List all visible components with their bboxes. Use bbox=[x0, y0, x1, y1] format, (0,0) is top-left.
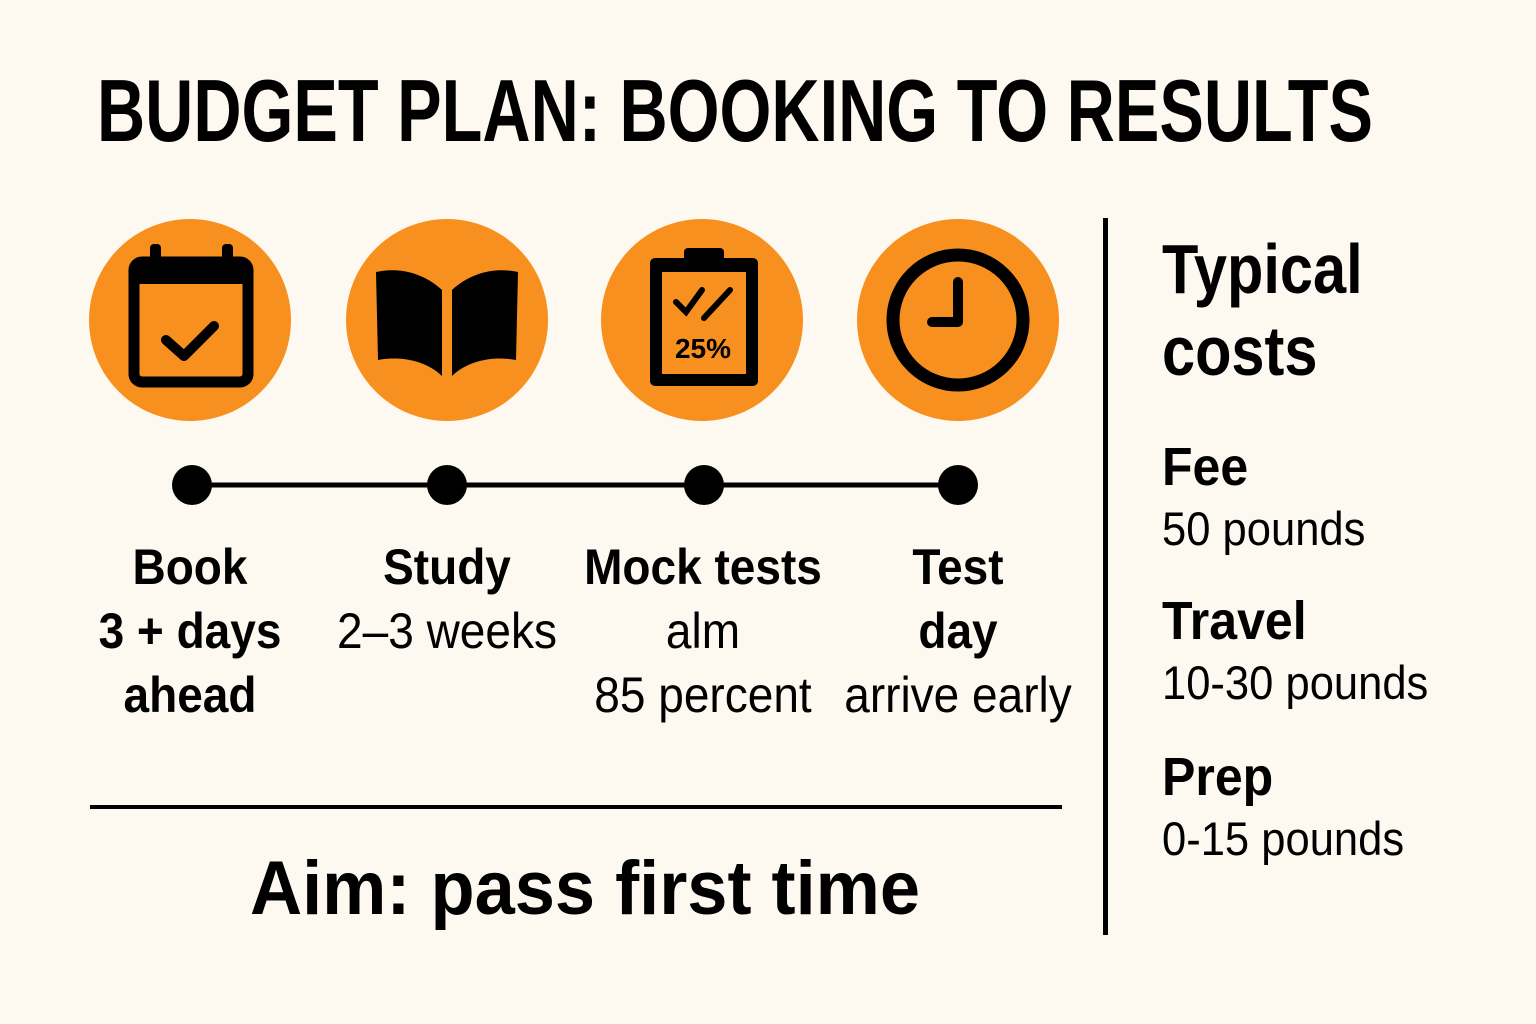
label: book: ahead bbox=[124, 667, 256, 723]
label: study bbox=[337, 539, 557, 659]
label: test day: Test bbox=[912, 539, 1004, 595]
icon: clock bbox=[857, 219, 1059, 421]
costs heading: Typical bbox=[1162, 230, 1363, 308]
icon: book bbox=[346, 219, 548, 421]
cost: fee: Fee bbox=[1162, 437, 1248, 497]
label: test day: arrive early bbox=[844, 667, 1072, 723]
label: mock tests: 85 percent bbox=[594, 667, 812, 723]
timeline bbox=[172, 465, 978, 505]
icon: clipboard 25%: 25% bbox=[675, 333, 731, 364]
label: mock tests: alm bbox=[666, 603, 740, 659]
cost: prep: 0-15 pounds bbox=[1162, 812, 1404, 865]
label: book: 3 + days bbox=[99, 603, 281, 659]
panel: typical costs bbox=[1162, 230, 1428, 865]
cost: travel bbox=[1162, 591, 1428, 709]
costs heading: costs bbox=[1162, 312, 1317, 390]
cost: fee bbox=[1162, 437, 1365, 555]
cost: travel: 10-30 pounds bbox=[1162, 656, 1428, 709]
icon: clipboard 25% bbox=[601, 219, 803, 421]
costs heading bbox=[1162, 230, 1363, 390]
label: book: Book bbox=[132, 539, 247, 595]
label: book bbox=[99, 539, 281, 723]
label: study: 2–3 weeks bbox=[337, 603, 557, 659]
aim text: Aim: pass first time bbox=[250, 846, 920, 931]
icons and timeline bbox=[89, 219, 1059, 505]
label: test day: day bbox=[918, 603, 998, 659]
label: mock tests bbox=[584, 539, 822, 723]
title: BUDGET PLAN: BOOKING TO RESULTS bbox=[97, 61, 1373, 160]
cost: prep bbox=[1162, 747, 1404, 865]
cost: travel: Travel bbox=[1162, 591, 1307, 651]
label: mock tests: Mock tests bbox=[584, 539, 822, 595]
cost: prep: Prep bbox=[1162, 747, 1273, 807]
icon: calendar bbox=[89, 219, 291, 421]
label: study: Study bbox=[383, 539, 511, 595]
cost: fee: 50 pounds bbox=[1162, 502, 1365, 555]
label: test day bbox=[844, 539, 1072, 723]
